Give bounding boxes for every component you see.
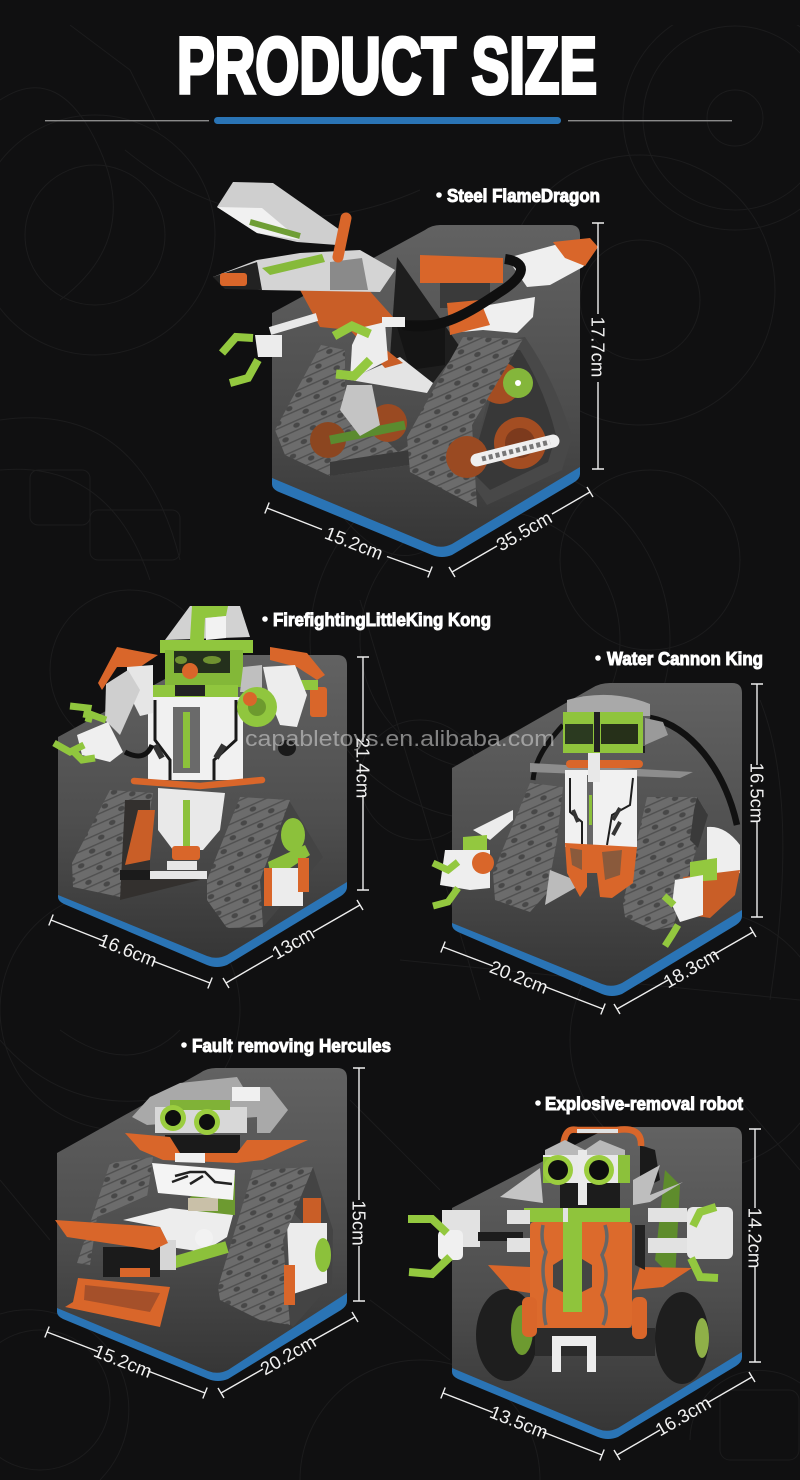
robot: explosive removal xyxy=(408,1129,733,1384)
dimension: 18.3cm: 18.3cm xyxy=(659,944,723,992)
dimension: 16.5cm xyxy=(746,684,768,917)
dimension: 20.2cm: 20.2cm xyxy=(487,956,551,998)
dimension: 35.5cm: 35.5cm xyxy=(492,507,556,555)
robot: water cannon xyxy=(433,695,740,946)
robot: dragon on tracks xyxy=(213,182,598,507)
dimension: 15cm xyxy=(348,1068,370,1301)
dimension: 14.2cm: 14.2cm xyxy=(744,1208,766,1268)
dimension: 17.7cm: 17.7cm xyxy=(588,317,608,377)
title divider xyxy=(45,117,732,124)
dimension: 18.3cm xyxy=(614,927,756,1014)
platform xyxy=(272,225,580,557)
dimension: 16.6cm: 16.6cm xyxy=(96,929,160,971)
dimension: 21.4cm xyxy=(352,657,374,890)
dimension: 20.2cm xyxy=(441,942,605,1014)
platform xyxy=(452,1127,742,1439)
dimension: 16.6cm xyxy=(49,914,212,988)
dimension: 13cm xyxy=(223,900,363,988)
dimension: 15.2cm: 15.2cm xyxy=(322,522,386,564)
robot: king kong xyxy=(54,606,327,928)
platform xyxy=(452,683,742,996)
dimension: 20.2cm: 20.2cm xyxy=(256,1331,320,1379)
dimension: 15.2cm xyxy=(265,502,432,578)
panel: Steel FlameDragon xyxy=(213,182,608,578)
dimension: 16.5cm: 16.5cm xyxy=(746,763,768,823)
dimension: 16.3cm xyxy=(614,1372,755,1460)
dimension: 17.7cm xyxy=(588,223,608,469)
dimension: 15cm: 15cm xyxy=(348,1200,370,1246)
dimension: 13.5cm xyxy=(441,1388,604,1460)
label: Fault removing Hercules: Fault removing Hercules xyxy=(192,1036,391,1056)
dimension: 16.3cm: 16.3cm xyxy=(651,1392,715,1440)
dimension: 35.5cm xyxy=(449,487,593,577)
label: Water Cannon King: Water Cannon King xyxy=(607,649,763,669)
panel: Explosive-removal robot xyxy=(408,1094,766,1460)
label: Explosive-removal robot: Explosive-removal robot xyxy=(545,1094,743,1114)
platform xyxy=(58,655,347,967)
dimension: 13.5cm: 13.5cm xyxy=(487,1401,551,1443)
label: Firefighting Little King Kong: FirefightingLittleKing Kong xyxy=(273,610,491,630)
robot: hercules xyxy=(55,1077,333,1327)
watermark: capabletoys.en.alibaba.com xyxy=(245,726,555,751)
title: PRODUCT SIZE xyxy=(177,21,597,110)
panel: Firefighting Little King Kong xyxy=(49,606,491,988)
platform xyxy=(57,1068,347,1381)
label: Steel FlameDragon: Steel FlameDragon xyxy=(447,186,600,206)
dimension: 21.4cm: 21.4cm xyxy=(352,738,374,798)
dimension: 20.2cm xyxy=(218,1312,358,1398)
dimension: 15.2cm: 15.2cm xyxy=(91,1340,155,1382)
panel: Fault removing Hercules xyxy=(45,1036,391,1398)
dimension: 14.2cm xyxy=(744,1129,766,1362)
panel: Water Cannon King xyxy=(433,649,768,1014)
dimension: 15.2cm xyxy=(45,1326,207,1398)
dimension: 13cm: 13cm xyxy=(268,923,318,963)
